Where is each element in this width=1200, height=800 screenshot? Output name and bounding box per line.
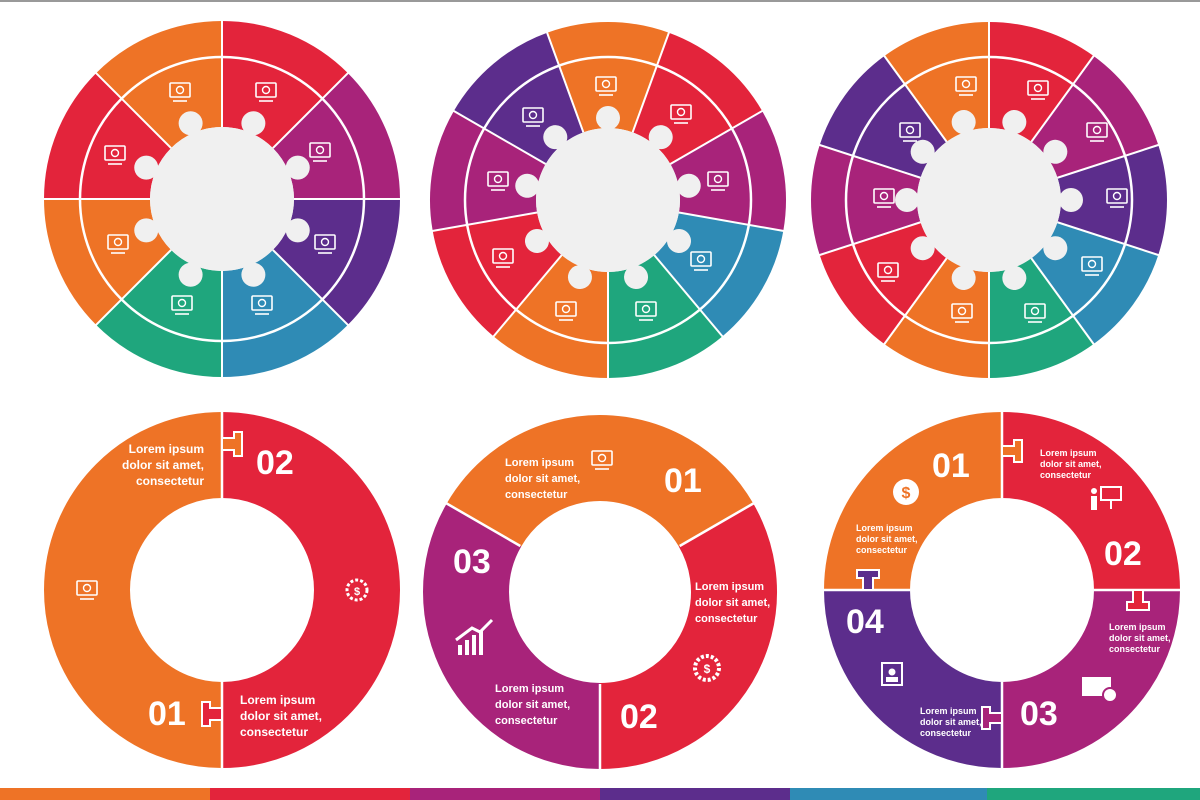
number 03: 03 <box>453 543 491 581</box>
icon: gear: $ <box>704 662 711 676</box>
icon: coins: $ <box>902 485 911 502</box>
text block: consectetur <box>856 545 908 555</box>
top border line <box>0 0 1200 2</box>
number 02: 02 <box>620 698 658 736</box>
text block: dolor sit amet, <box>1040 459 1102 469</box>
text block: Lorem ipsum <box>695 581 764 593</box>
panel: 2-part ring <box>77 411 367 769</box>
text block: Lorem ipsum <box>856 523 913 533</box>
text block: dolor sit amet, <box>240 709 322 723</box>
icon: gear <box>347 580 367 600</box>
number 01: 01 <box>932 447 970 485</box>
panel: 3-part ring <box>417 409 783 775</box>
text block: Lorem ipsum <box>240 693 315 707</box>
icon: presentation <box>1091 487 1121 510</box>
icon: monitor <box>77 581 97 599</box>
text block: dolor sit amet, <box>920 717 982 727</box>
text block: consectetur <box>495 715 558 727</box>
text block: dolor sit amet, <box>695 597 770 609</box>
number 01: 01 <box>664 462 702 500</box>
text block: consectetur <box>240 725 308 739</box>
panel: 4-part ring <box>824 412 1180 768</box>
text block: Lorem ipsum <box>1109 622 1166 632</box>
number 02: 02 <box>256 444 294 482</box>
text block: consectetur <box>1040 470 1092 480</box>
panel: puzzle wheel 10 segments <box>814 20 1164 380</box>
bottom color strip <box>0 788 1200 800</box>
text block: Lorem ipsum <box>1040 448 1097 458</box>
tabs <box>222 432 242 456</box>
number 03: 03 <box>1020 695 1058 733</box>
text block: consectetur <box>695 613 758 625</box>
text block: dolor sit amet, <box>505 473 580 485</box>
text block: dolor sit amet, <box>495 699 570 711</box>
text block: dolor sit amet, <box>122 458 204 472</box>
text block: Lorem ipsum <box>920 706 977 716</box>
icon: coins <box>893 479 919 505</box>
number 01: 01 <box>148 695 186 733</box>
panel: puzzle wheel 8 segments <box>43 20 401 378</box>
icon: gear <box>695 656 719 680</box>
text block: consectetur <box>1109 644 1161 654</box>
icons <box>105 83 335 314</box>
number 02: 02 <box>1104 535 1142 573</box>
icon: calendar <box>1082 677 1117 702</box>
text block: consectetur <box>136 474 204 488</box>
icon: chart <box>456 620 492 655</box>
icons <box>488 77 728 320</box>
text block: Lorem ipsum <box>505 457 574 469</box>
icon: monitor <box>592 451 612 469</box>
text block: Lorem ipsum <box>129 442 204 456</box>
text block: dolor sit amet, <box>1109 633 1171 643</box>
icon: gear: $ <box>354 586 360 598</box>
tabs <box>1002 440 1022 462</box>
text block: dolor sit amet, <box>856 534 918 544</box>
number 04: 04 <box>846 603 884 641</box>
text block: consectetur <box>920 728 972 738</box>
icon: id badge <box>882 663 902 685</box>
panel: puzzle wheel 9 segments <box>431 24 785 380</box>
text block: consectetur <box>505 489 568 501</box>
icons <box>874 77 1127 322</box>
text block: Lorem ipsum <box>495 683 564 695</box>
